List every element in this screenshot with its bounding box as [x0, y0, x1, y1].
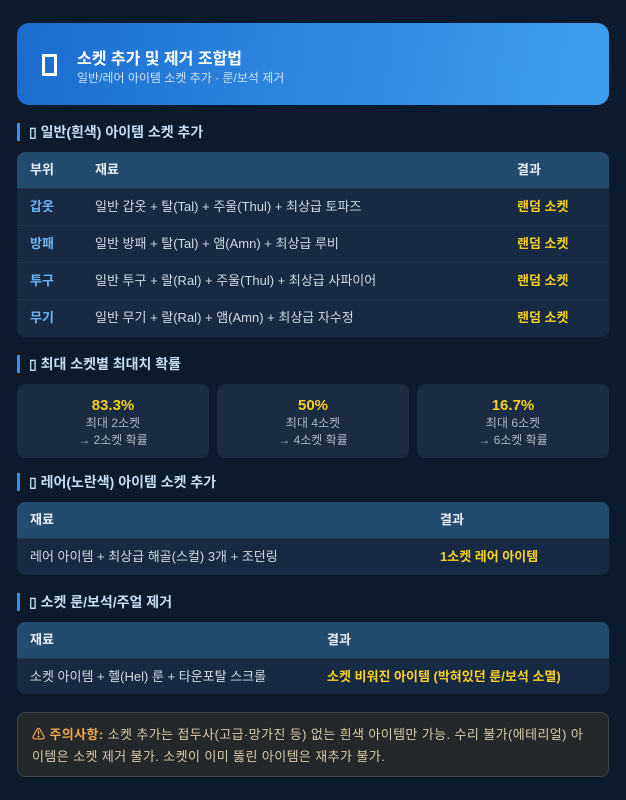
- table: normal item socket: 갑옷: [30, 199, 54, 214]
- table: normal item socket: 일반 갑옷 + 탈(Tal) + 주울(Thul) + 최상급 토파즈: [95, 199, 361, 214]
- section heading: rare item: ▯ 레어(노란색) 아이템 소켓 추가: [29, 474, 216, 490]
- card: 2 socket: 최대 2소켓: [86, 416, 140, 430]
- table: normal item socket: 랜덤 소켓: [517, 199, 568, 214]
- card: 4 socket: [217, 384, 409, 458]
- icon: socket placeholder: [42, 54, 57, 76]
- card: 4 socket: 50%: [298, 397, 328, 414]
- card: 4 socket: 최대 4소켓: [286, 416, 340, 430]
- section heading: normal item: ▯ 일반(흰색) 아이템 소켓 추가: [29, 124, 203, 140]
- table: normal item socket: 무기: [30, 310, 54, 325]
- table: normal item socket: 재료: [95, 162, 119, 177]
- table: removal: 소켓 아이템 + 헬(Hel) 룬 + 타운포탈 스크롤: [30, 669, 266, 684]
- table: normal item socket: 부위: [30, 162, 54, 177]
- card: 6 socket: [417, 384, 609, 458]
- card: 6 socket: 최대 6소켓: [486, 416, 540, 430]
- table: removal: 재료: [30, 632, 54, 647]
- table: rare item: 1소켓 레어 아이템: [440, 549, 538, 564]
- card: 6 socket: → 6소켓 확률: [478, 433, 548, 447]
- callout: warning: ⚠ 주의사항: 소켓 추가는 접두사(고급·망가진 등) 없는 흰색 아이템만 가능. 수리 불가(에테리얼) 아이템은 소켓 제거 불가. 소켓이 이미 뚫린 아이템은 재추가 불가.: [32, 727, 583, 764]
- table: normal item socket: 랜덤 소켓: [517, 236, 568, 251]
- table: normal item socket: 일반 방패 + 탈(Tal) + 앰(Amn) + 최상급 루비: [95, 236, 339, 251]
- card: 2 socket: → 2소켓 확률: [78, 433, 148, 447]
- table: normal item socket: 일반 투구 + 랄(Ral) + 주울(Thul) + 최상급 사파이어: [95, 273, 376, 288]
- table: normal item socket: [17, 152, 609, 337]
- table: removal: [17, 622, 609, 694]
- table: normal item socket: 방패: [30, 236, 54, 251]
- subtitle: 일반/레어 아이템 소켓 추가 · 룬/보석 제거: [77, 71, 284, 85]
- section heading: probabilities: ▯ 최대 소켓별 최대치 확률: [29, 356, 181, 372]
- card: 2 socket: [17, 384, 209, 458]
- table: rare item: [17, 502, 609, 575]
- table: normal item socket: 랜덤 소켓: [517, 310, 568, 325]
- table: normal item socket: 결과: [517, 162, 541, 177]
- table: removal: 결과: [327, 632, 351, 647]
- card: 6 socket: 16.7%: [492, 397, 534, 414]
- table: normal item socket: 일반 무기 + 랄(Ral) + 앰(Amn) + 최상급 자수정: [95, 310, 354, 325]
- title: 소켓 추가 및 제거 조합법: [77, 51, 242, 68]
- callout: warning: [17, 712, 609, 777]
- table: rare item: 레어 아이템 + 최상급 해골(스컬) 3개 + 조던링: [30, 549, 278, 564]
- table: rare item: 재료: [30, 512, 54, 527]
- table: normal item socket: 투구: [30, 273, 54, 288]
- table: normal item socket: 랜덤 소켓: [517, 273, 568, 288]
- header banner: [17, 23, 609, 105]
- table: removal: 소켓 비워진 아이템 (박혀있던 룬/보석 소멸): [327, 669, 561, 684]
- section heading: removal: ▯ 소켓 룬/보석/주얼 제거: [29, 594, 172, 610]
- card: 2 socket: 83.3%: [92, 397, 134, 414]
- table: rare item: 결과: [440, 512, 464, 527]
- card: 4 socket: → 4소켓 확률: [278, 433, 348, 447]
